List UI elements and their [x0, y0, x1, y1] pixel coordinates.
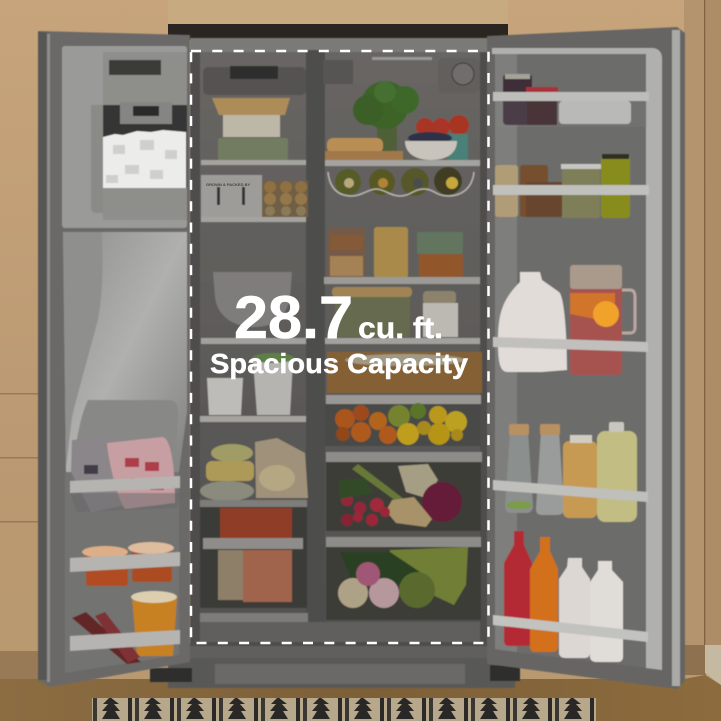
door shelf 5 with bottles	[493, 531, 648, 662]
door shelf 2 with jars	[493, 154, 649, 218]
freezer shelf 2	[201, 217, 306, 222]
wine rack with bottles	[328, 167, 474, 196]
freezer drawer with seafood	[200, 500, 308, 622]
freezer shelf 4	[200, 416, 306, 422]
tomatoes, berries and basket	[405, 115, 469, 160]
fridge base and hinges	[150, 643, 520, 688]
fridge shelf 4	[326, 395, 481, 404]
bread on board	[325, 138, 403, 160]
door gasket	[492, 48, 662, 670]
ice dispenser housing	[91, 52, 187, 220]
salad jar and takeout box	[332, 287, 458, 337]
small box label text: GROWN & PACKED BY	[206, 182, 250, 187]
door shelf 4 with carafes and juices	[493, 422, 648, 522]
ice bin	[103, 102, 187, 188]
food storage containers	[328, 227, 463, 278]
root vegetable drawer	[326, 547, 481, 620]
vegetable drawer	[326, 462, 481, 531]
fruit drawer	[325, 403, 480, 446]
wrapped freezer packages	[200, 438, 308, 501]
freezer food: pie and containers	[212, 98, 290, 160]
door panel lower	[65, 472, 179, 673]
callout: capacity figure	[210, 284, 468, 379]
interior floor	[200, 622, 480, 642]
mixing bowl	[213, 272, 292, 327]
white cups	[207, 353, 294, 415]
parsley in vase	[353, 81, 419, 151]
drawer rail	[326, 452, 482, 462]
fridge shelf 1	[325, 160, 480, 166]
door shelf 1 with jars and dish	[493, 74, 649, 127]
patterned rug	[92, 698, 596, 721]
door bin 2 with soup containers	[70, 542, 180, 586]
capacity label: Spacious Capacity	[210, 348, 468, 379]
fridge shelf 2	[324, 277, 480, 284]
freezer shelf 1	[201, 160, 306, 165]
produce box and muffins	[201, 175, 308, 217]
panel: right refrigerator door	[487, 27, 685, 689]
drawer rail	[326, 537, 481, 547]
stainless dispenser panel	[63, 232, 187, 472]
dashed capacity outline	[191, 51, 488, 643]
door bin 3 with jar and meat	[70, 591, 180, 664]
panel: left freezer door	[38, 31, 190, 687]
panel: refrigerator interior	[190, 38, 488, 646]
fridge shelf 3	[325, 338, 480, 344]
cardboard tray	[327, 352, 482, 393]
capacity unit: cu. ft.	[358, 312, 443, 345]
capacity number: 28.7	[234, 284, 353, 351]
floor	[0, 675, 721, 721]
door bin 1 with freezer bags	[70, 435, 180, 512]
dispenser recess	[72, 400, 178, 476]
door shelf 3 with milk jug and pitcher	[493, 265, 648, 375]
freezer shelf 3	[201, 338, 306, 344]
